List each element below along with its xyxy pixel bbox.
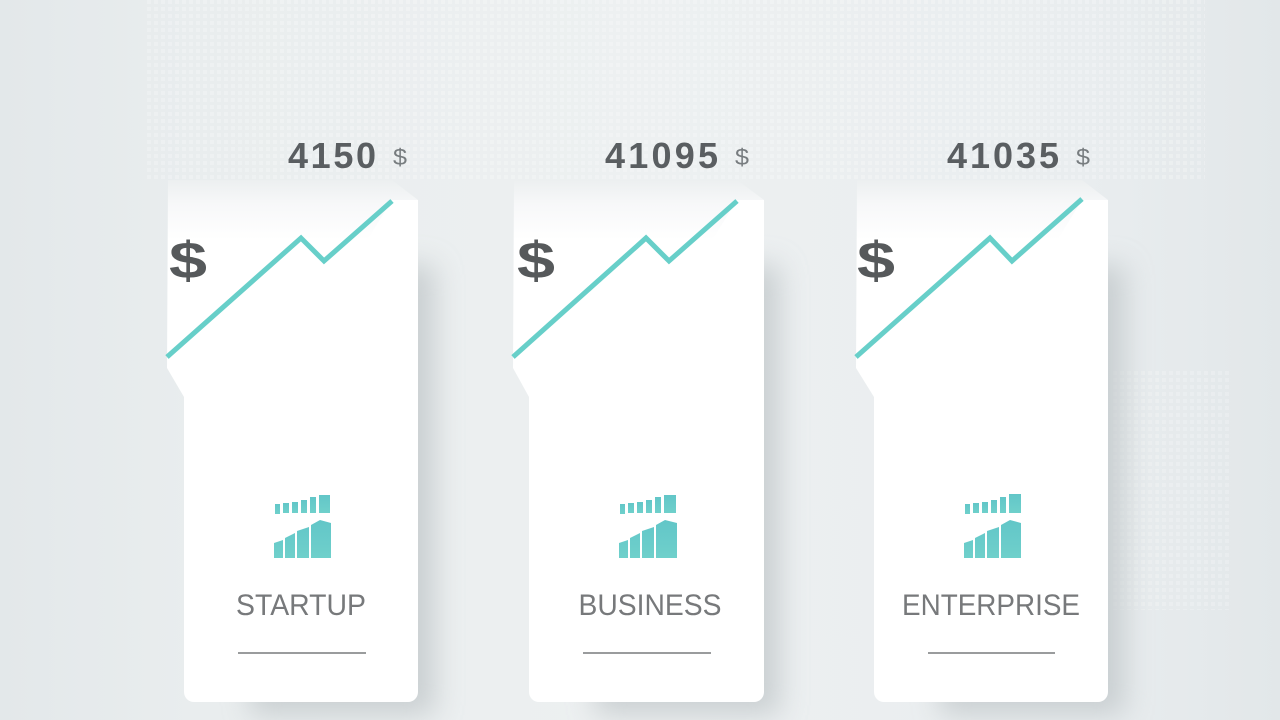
plan name: BUSINESS bbox=[578, 589, 722, 622]
card top right bbox=[330, 200, 418, 300]
price: 41095 bbox=[605, 135, 718, 176]
card shadow bbox=[595, 265, 780, 715]
card body bbox=[513, 180, 764, 702]
trend line bbox=[167, 201, 392, 357]
trend line bbox=[513, 201, 737, 357]
icon: bar chart bbox=[619, 495, 677, 558]
trend line bbox=[856, 199, 1082, 357]
card top right bbox=[675, 200, 764, 300]
dollar symbol: $ bbox=[517, 232, 555, 290]
plan name: STARTUP bbox=[236, 589, 366, 622]
card body bbox=[167, 180, 418, 702]
panel: business bbox=[513, 135, 780, 715]
divider bbox=[928, 652, 1055, 654]
plan name: ENTERPRISE bbox=[902, 589, 1080, 622]
divider bbox=[583, 652, 711, 654]
panel: enterprise bbox=[856, 135, 1125, 715]
dollar symbol: $ bbox=[857, 232, 895, 290]
price: 4150 bbox=[288, 135, 376, 176]
icon: bar chart bbox=[964, 494, 1021, 558]
card body bbox=[856, 180, 1108, 702]
card top right bbox=[1020, 200, 1108, 300]
price: 41035 bbox=[947, 135, 1059, 176]
panel: startup bbox=[167, 135, 435, 715]
currency mark: $ bbox=[735, 144, 749, 170]
currency mark: $ bbox=[1076, 144, 1090, 170]
currency mark: $ bbox=[393, 144, 407, 170]
card shadow bbox=[940, 265, 1125, 715]
divider bbox=[238, 652, 366, 654]
icon: bar chart bbox=[274, 495, 331, 558]
card shadow bbox=[250, 265, 435, 715]
dollar symbol: $ bbox=[169, 232, 207, 290]
